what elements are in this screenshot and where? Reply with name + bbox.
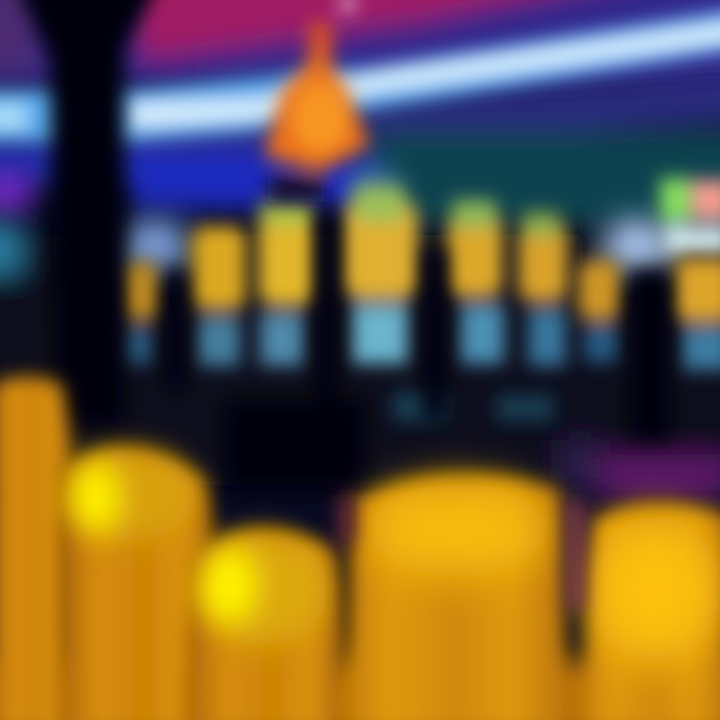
coin stack 3: [185, 530, 345, 720]
coin highlight 5: [589, 516, 720, 664]
light strip: [0, 6, 720, 142]
machine 3: [258, 200, 316, 366]
coin stack far left: [0, 376, 72, 720]
coin highlight 4: [368, 484, 548, 576]
machine 7: [578, 260, 620, 362]
gold coin stacks: [0, 376, 720, 720]
slot machines row: [122, 186, 720, 422]
machine 6: [518, 212, 568, 366]
upper wall: dark blue band below the light: [0, 70, 720, 230]
rainbow sign at right: [660, 178, 720, 254]
coin stack 5: [582, 504, 720, 720]
coin stack 4: [345, 475, 568, 720]
black pillar: [14, 0, 160, 425]
coin highlight 2: [64, 449, 196, 541]
orange lantern: [264, 0, 370, 202]
machine 5: [447, 200, 554, 422]
machine 1: [122, 262, 158, 364]
machine dividers: [166, 210, 670, 490]
machine 2: [192, 226, 246, 366]
machine 4: [342, 186, 448, 422]
gap between coins: [338, 495, 584, 610]
coin stack 2: [58, 450, 215, 720]
ceiling: magenta and purple band: [0, 0, 720, 90]
mid wall: dark machine zone: [0, 170, 720, 500]
machine 8: [674, 258, 720, 370]
gold base glow along the bottom: [0, 660, 720, 720]
coin highlight 3: [196, 534, 328, 646]
